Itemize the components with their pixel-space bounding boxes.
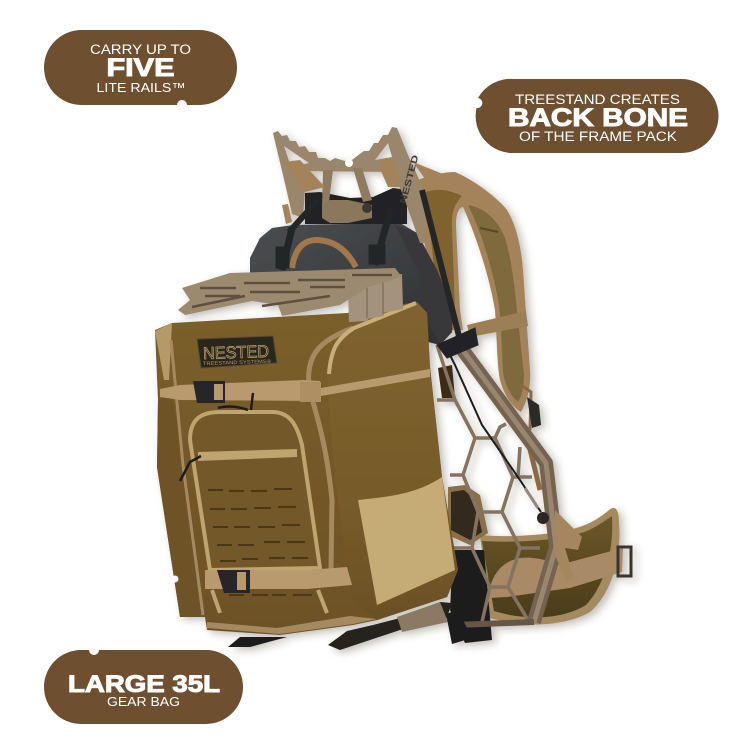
side pouch piping (329, 303, 416, 374)
callout: treestand creates back bone of the frame pack: BACK BONE (508, 104, 688, 132)
crown strap wraps (282, 158, 453, 224)
notch dot on bag (172, 576, 178, 582)
gear bag (155, 302, 458, 635)
hip belt (480, 508, 623, 625)
tree stand crown (273, 127, 426, 243)
lower bag trim (207, 616, 377, 634)
callout: treestand creates back bone of the frame pack (476, 79, 718, 153)
bag side panel (157, 395, 205, 617)
belt webbing (488, 548, 623, 598)
lower webbing strap (205, 567, 352, 589)
callout: treestand creates back bone of the frame pack: TREESTAND CREATES (515, 92, 680, 107)
black webbing straps (276, 190, 478, 358)
product photo: backpack with frame (155, 127, 631, 650)
bag side pouch (327, 302, 458, 620)
callout: carry up to five lite rails: FIVE (106, 54, 174, 82)
shoulder strap (418, 172, 541, 490)
callout: carry up to five lite rails (44, 30, 237, 105)
lumbar pads (438, 365, 492, 643)
front organiser pocket (190, 412, 320, 570)
crown maker mark: NESTED (398, 153, 421, 205)
frame cable and tensioner (445, 345, 549, 524)
callout: carry up to five lite rails: LITE RAILS™ (96, 80, 186, 95)
belt strap loop (555, 510, 582, 581)
pad carry handle (292, 240, 356, 268)
dark mount behind crown (305, 188, 407, 224)
brand patch: NESTED (203, 342, 269, 363)
upper webbing strap (160, 380, 321, 401)
laser-cut molle slots (208, 489, 312, 595)
zipper pull (180, 456, 201, 481)
callout: large 35L gear bag (44, 650, 243, 724)
lower piping (212, 590, 327, 613)
drawcord (218, 393, 253, 410)
bag body (155, 302, 458, 635)
rail deck cutouts (192, 275, 392, 307)
rail feet below bag (228, 602, 472, 650)
mesh pocket (358, 477, 455, 605)
strap keeper (300, 382, 321, 402)
belt buckle (618, 547, 631, 576)
callout: carry up to five lite rails: CARRY UP TO (90, 42, 191, 57)
rail ends (348, 274, 403, 322)
lower buckle (217, 570, 250, 593)
callout: large 35L gear bag: LARGE 35L (68, 671, 220, 698)
side pouch binding (309, 328, 353, 570)
rail deck (178, 268, 402, 316)
callout: treestand creates back bone of the frame pack: OF THE FRAME PACK (519, 129, 677, 144)
callout: large 35L gear bag: GEAR BAG (107, 694, 180, 709)
upper buckle (193, 381, 225, 403)
organiser zip band (198, 449, 297, 461)
hexagonal lower frame (437, 345, 556, 625)
notch dot on crown (345, 159, 353, 167)
back pad (250, 223, 453, 345)
bag left edge binding (155, 323, 172, 380)
lite rails on top of bag (178, 268, 403, 322)
brand patch (197, 336, 277, 368)
brand patch: TREESTAND SYSTEMS® (203, 358, 271, 367)
